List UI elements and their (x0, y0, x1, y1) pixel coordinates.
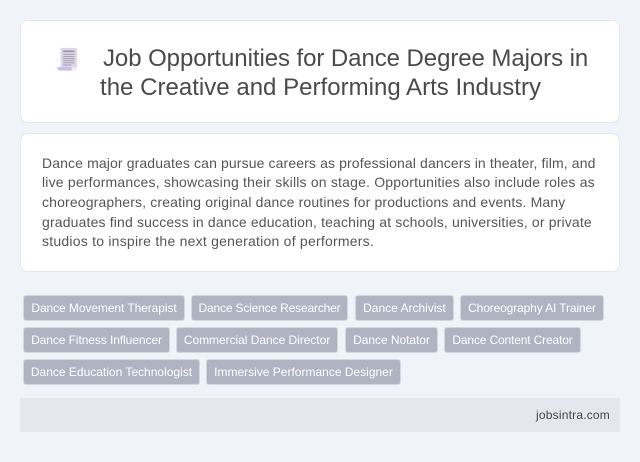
tag (23, 295, 185, 321)
tag: Dance Movement Therapist (31, 301, 177, 315)
text block: description: Dance major graduates can pursue careers as professional dancers in theater, film, and (42, 155, 596, 171)
tag: Dance Fitness Influencer (31, 333, 162, 347)
title (100, 45, 588, 101)
tag (23, 359, 200, 385)
tag: Dance Science Researcher (198, 301, 340, 315)
tag (23, 327, 170, 353)
panel: header (20, 20, 620, 123)
tag (176, 327, 338, 353)
title: Job Opportunities for Dance Degree Majors in (103, 45, 588, 72)
text block: description: studios to inspire the next generation of performers. (42, 233, 374, 249)
tag: Commercial Dance Director (184, 333, 330, 347)
footer bar (20, 398, 620, 432)
tag: Immersive Performance Designer (214, 365, 393, 379)
tag: Dance Notator (353, 333, 430, 347)
tag: Choreography AI Trainer (468, 301, 596, 315)
text block: description (42, 155, 596, 249)
tag (345, 327, 438, 353)
text block: description: live performances, showcasing their skills on stage. Opportunities also include roles as (42, 174, 595, 190)
tag (444, 327, 581, 353)
tag (191, 295, 348, 321)
icon: paper scroll (57, 48, 77, 71)
footer source: jobsintra.com (536, 408, 610, 422)
tag (355, 295, 454, 321)
tag (206, 359, 401, 385)
tag: Dance Education Technologist (31, 365, 192, 379)
tag: Dance Content Creator (452, 333, 573, 347)
tag: Dance Archivist (363, 301, 446, 315)
text block: description: choreographers, creating original dance routines for productions and events. Many (42, 194, 565, 210)
text block: description: graduates find success in dance education, teaching at schools, universities, or private (42, 214, 592, 230)
tag list (23, 295, 604, 385)
tag (460, 295, 604, 321)
title: the Creative and Performing Arts Industry (100, 74, 541, 101)
panel: description (20, 133, 620, 272)
